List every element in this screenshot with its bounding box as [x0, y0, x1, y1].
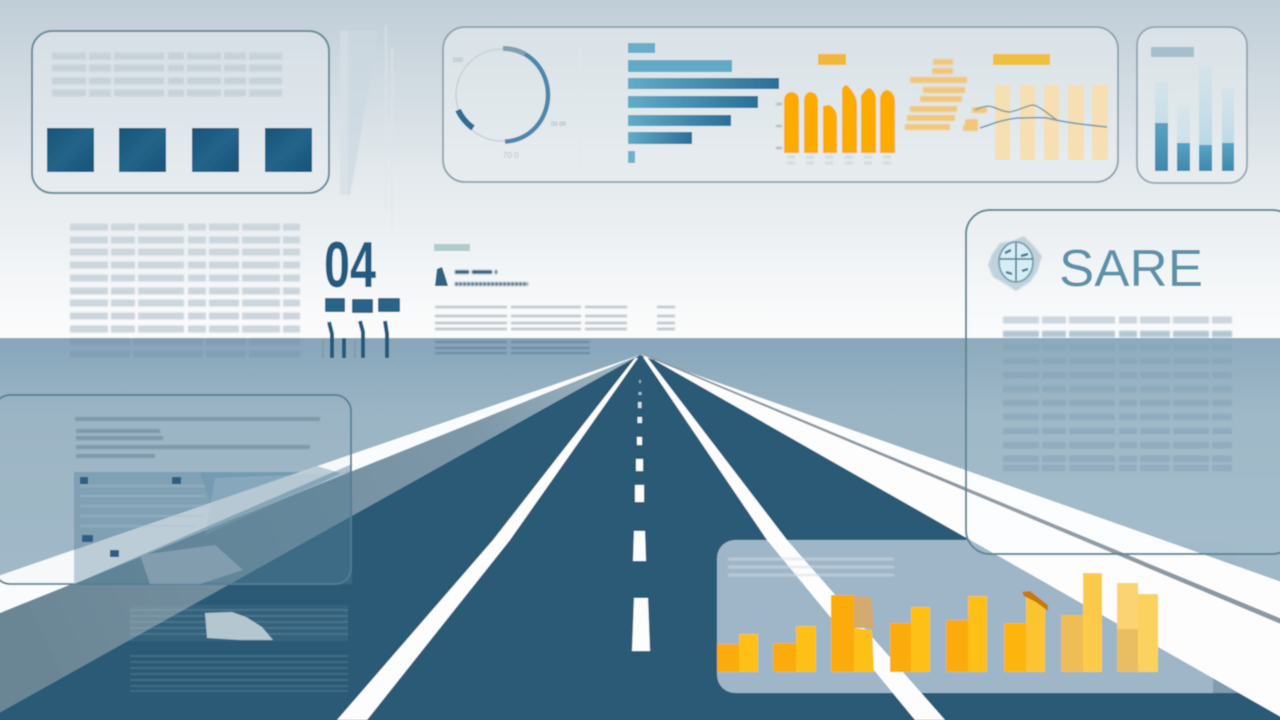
- small icon tiles and pins: [323, 298, 400, 358]
- grouped bar chart: [717, 573, 1158, 672]
- panel: top left summary card: [32, 31, 329, 193]
- road surface: [0, 355, 1280, 720]
- ground background: [0, 338, 1280, 720]
- ring gauge: 70 0: [503, 151, 519, 160]
- ring gauge: [453, 48, 567, 160]
- central body text block: [435, 307, 675, 353]
- panel: bottom left text block on road: [130, 605, 348, 691]
- right road shoulder: [640, 355, 1280, 720]
- panel: bottom right bar chart background: [717, 540, 1253, 693]
- darker series: [717, 583, 1138, 672]
- lighter series: [739, 573, 1158, 672]
- brand name: SARE: [1059, 240, 1203, 298]
- light columns: [1155, 67, 1234, 171]
- orange text list: [905, 62, 987, 128]
- heading lines: [75, 419, 320, 456]
- ring gauge: 000: [453, 58, 464, 64]
- text block: [52, 56, 282, 93]
- document tiles: [80, 477, 181, 557]
- dark columns: [1155, 123, 1234, 171]
- panel: small column chart card: [1137, 27, 1247, 183]
- orange column chart: [776, 54, 895, 163]
- body text upper: [1003, 316, 1232, 324]
- subtitle lines: [455, 270, 497, 274]
- horizontal bar chart: [628, 43, 779, 163]
- ring gauge: 00 00: [551, 122, 567, 128]
- icon: person: [435, 267, 448, 286]
- document image block: [74, 464, 352, 584]
- vertical decorative wedge: [340, 25, 392, 230]
- sky background: [0, 0, 1280, 338]
- panel: left translucent document card: [0, 395, 352, 584]
- central heading group: [434, 244, 528, 286]
- big number 04: 04: [324, 230, 376, 302]
- four dark tiles: [47, 128, 312, 172]
- left body text block: [70, 227, 300, 354]
- tag: [434, 244, 470, 251]
- icon: shield logo: [988, 236, 1042, 291]
- pale column chart with trend lines: [975, 54, 1108, 160]
- icon: open book: [205, 612, 273, 640]
- left white lane line: [337, 358, 638, 720]
- dark cap on bar: [1022, 591, 1048, 611]
- centre dashed lane markings: [632, 380, 650, 651]
- panel: top analytics dashboard: [443, 27, 1118, 182]
- body text lower: [1003, 334, 1232, 468]
- panel: SARE brand card: [966, 210, 1280, 554]
- header tag: [1151, 47, 1194, 57]
- bottom right chart text: [728, 559, 894, 575]
- right white lane line: [643, 357, 945, 720]
